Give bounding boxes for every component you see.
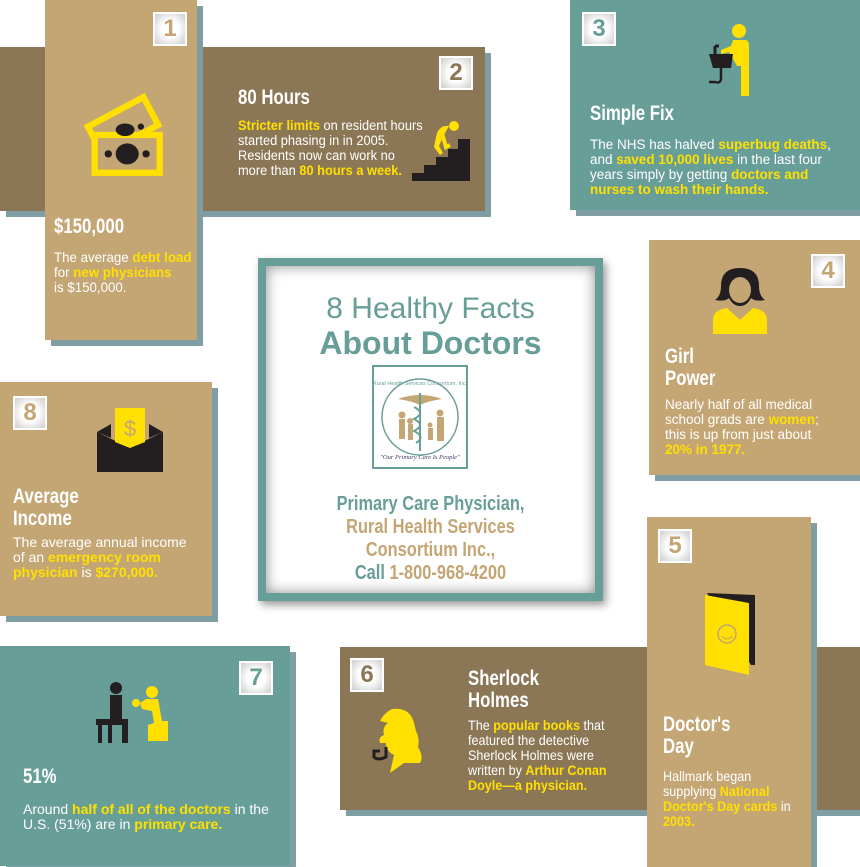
panel 4: girl power	[649, 240, 860, 475]
panel 3: simple fix	[570, 0, 860, 210]
icon: sherlock silhouette	[372, 708, 422, 773]
title	[319, 292, 542, 361]
contact text: Consortium Inc.,	[366, 539, 495, 561]
title: 8 Healthy Facts	[326, 292, 535, 325]
text: doctor's day: 2003.	[663, 813, 695, 829]
badge 1: 1	[163, 15, 177, 42]
badge 2: 2	[449, 59, 463, 86]
text: doctor's day	[663, 768, 791, 829]
text: 80 hours	[238, 118, 423, 178]
text: doctor's day: Doctor's Day cards in	[663, 798, 791, 814]
heading: Average Income	[13, 485, 79, 530]
badge 4	[811, 254, 845, 288]
heading: Doctor's Day: Doctor's	[663, 713, 730, 736]
text: sherlock	[468, 717, 607, 793]
text: sherlock: Doyle—a physician.	[468, 777, 587, 793]
icon: money	[84, 92, 163, 176]
text: doctor's day: supplying National	[663, 783, 769, 799]
text: 80 hours: more than 80 hours a week.	[238, 163, 402, 178]
text: income	[13, 534, 187, 580]
text: debt	[54, 249, 191, 295]
text: girl power: 20% in 1977.	[665, 442, 745, 457]
text: simple fix	[590, 137, 831, 197]
badge 3: 3	[592, 15, 606, 42]
text: girl power	[665, 397, 819, 457]
logo: "Our Primary Care Is People"	[380, 454, 460, 461]
heading: Doctor's Day: Day	[663, 735, 694, 758]
panel 1: debt	[45, 0, 197, 340]
text: debt: is $150,000.	[54, 279, 126, 295]
heading: Doctor's Day	[663, 713, 730, 758]
text: debt: for new physicians	[54, 264, 172, 280]
contact text: Call 1-800-968-4200	[355, 562, 506, 584]
text: girl power: this is up from just about	[665, 427, 811, 442]
heading: Sherlock Holmes	[468, 667, 539, 712]
badge 6: 6	[360, 661, 374, 688]
title: About Doctors	[319, 325, 542, 361]
text: 51%: Around half of all of the doctors in the	[23, 801, 269, 817]
icon: hand washing	[709, 24, 749, 96]
badge 1	[153, 12, 187, 46]
badge 5	[658, 529, 692, 563]
heading: $150,000: $150,000	[54, 215, 124, 238]
text: simple fix: nurses to wash their hands.	[590, 182, 769, 197]
panel 5: doctor's day	[647, 517, 811, 867]
badge 8	[13, 396, 47, 430]
text: 51%: U.S. (51%) are in primary care.	[23, 816, 222, 832]
heading: Girl Power: Girl	[665, 345, 694, 368]
panel 8: average income	[0, 382, 212, 616]
text: income: The average annual income	[13, 534, 187, 550]
heading: Sherlock Holmes: Sherlock	[468, 667, 539, 690]
text: sherlock: written by Arthur Conan	[468, 762, 607, 778]
contact text: Rural Health Services	[346, 516, 515, 538]
text: girl power: Nearly half of all medical	[665, 397, 812, 412]
heading: 80 Hours: 80 Hours	[238, 86, 310, 109]
icon: stairs climber	[412, 121, 470, 181]
text: doctor's day: Hallmark began	[663, 768, 751, 784]
icon: greeting card	[705, 593, 755, 675]
text: girl power: school grads are women;	[665, 412, 819, 427]
text: debt: The average debt load	[54, 249, 191, 265]
heading: Girl Power	[665, 345, 716, 390]
contact text	[337, 493, 524, 584]
icon: envelope with money: $	[124, 416, 136, 441]
text: 80 hours: Stricter limits on resident hours	[238, 118, 423, 133]
icon: envelope with money	[97, 408, 163, 472]
badge 2	[439, 56, 473, 90]
badge 7	[239, 661, 273, 695]
center title box	[258, 258, 603, 601]
heading: Average Income: Average	[13, 485, 79, 508]
text: sherlock: The popular books that	[468, 717, 605, 733]
text: simple fix: and saved 10,000 lives in the last four	[590, 152, 822, 167]
text: 51%	[23, 801, 269, 832]
logo: Rural Health Services Consortium, Inc.	[374, 381, 466, 387]
badge 4: 4	[821, 257, 835, 284]
heading: Average Income: Income	[13, 507, 72, 530]
badge 5: 5	[668, 532, 682, 559]
heading: 51%: 51%	[23, 765, 57, 788]
panel 6: sherlock holmes	[340, 647, 860, 810]
text: 80 hours: started phasing in in 2005.	[238, 133, 388, 148]
heading: Girl Power: Power	[665, 367, 715, 390]
panel 2: 80 hours	[0, 47, 485, 211]
logo	[372, 365, 468, 469]
badge 3	[582, 12, 616, 46]
heading: Simple Fix: Simple Fix	[590, 102, 674, 125]
text: simple fix: The NHS has halved superbug deaths,	[590, 137, 831, 152]
badge 8: 8	[23, 399, 37, 426]
text: sherlock: Sherlock Holmes were	[468, 747, 594, 763]
panel 7: primary care	[0, 646, 290, 866]
badge 7: 7	[249, 664, 263, 691]
contact text: Primary Care Physician,	[337, 493, 524, 515]
heading: Sherlock Holmes: Holmes	[468, 689, 529, 712]
text: sherlock: featured the detective	[468, 732, 589, 748]
text: income: physician is $270,000.	[13, 564, 158, 580]
icon: woman doctor	[713, 268, 767, 334]
badge 6	[350, 658, 384, 692]
icon: doctor and patient	[96, 682, 168, 743]
text: simple fix: years simply by getting doctors and	[590, 167, 808, 182]
text: 80 hours: Residents now can work no	[238, 148, 395, 163]
text: income: of an emergency room	[13, 549, 161, 565]
